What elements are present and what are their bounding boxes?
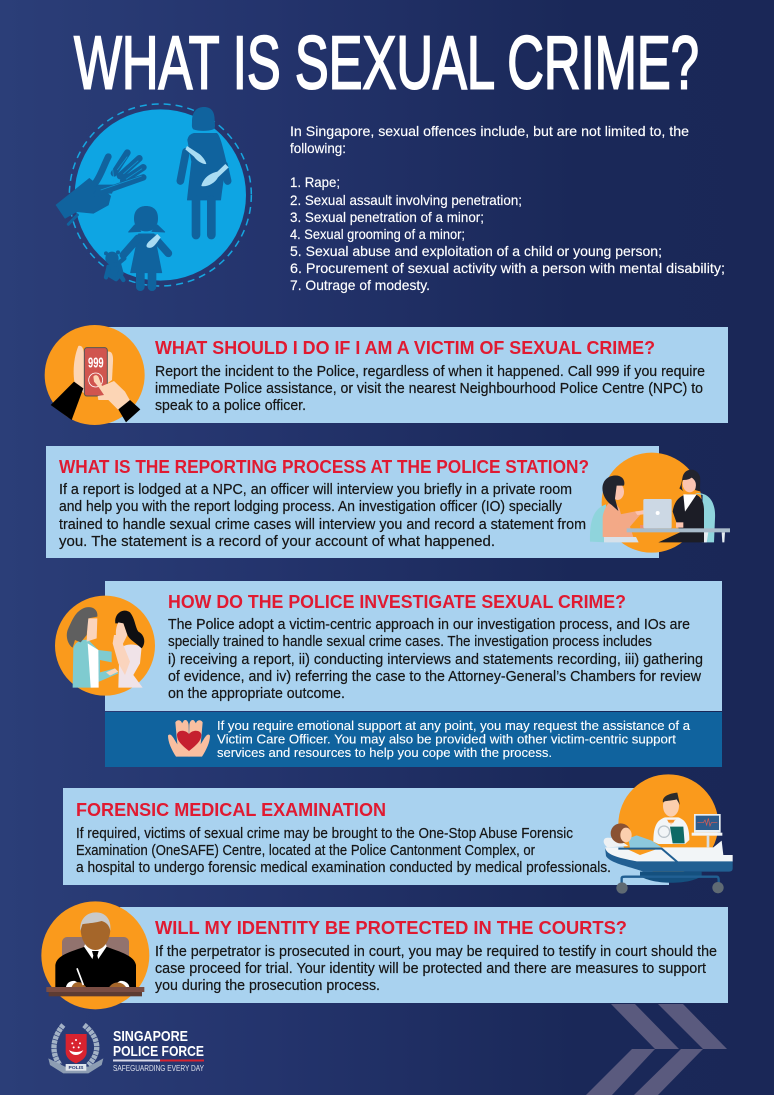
- logo text: Singapore Police Force: SINGAPORE: [113, 1028, 188, 1045]
- text block: reporting process: [59, 482, 586, 550]
- text block: victim advice: [155, 364, 705, 414]
- icon: phone calling 999: [45, 325, 145, 425]
- text block: victim advice: immediate Police assistance, or visit the nearest Neighbourhood Police Centre (NPC) to: [155, 381, 703, 397]
- heading: forensic: FORENSIC MEDICAL EXAMINATION: [76, 799, 386, 820]
- text block: victim advice: speak to a police officer.: [155, 398, 306, 414]
- text block: investigation: [168, 617, 703, 702]
- text block: investigation: specially trained to handle sexual crime cases. The investigation process includes: [168, 634, 652, 650]
- logo text: Singapore Police Force: POLICE FORCE: [113, 1043, 204, 1060]
- text block: forensic examination: [76, 826, 611, 876]
- intro text: list of sexual offences: following:: [290, 141, 346, 156]
- text block: reporting process: and help you with the report lodging process. An investigation officer (IO) specially: [59, 499, 563, 515]
- intro text: list of sexual offences: 6. Procurement of sexual activity with a person with mental disability;: [290, 261, 725, 276]
- heading: reporting process: WHAT IS THE REPORTING PROCESS AT THE POLICE STATION?: [59, 456, 589, 477]
- intro text: list of sexual offences: 7. Outrage of modesty.: [290, 278, 430, 293]
- intro text: list of sexual offences: In Singapore, sexual offences include, but are not limited to, the: [290, 124, 689, 139]
- text block: victim care officer: If you require emotional support at any point, you may request the assistance of a: [217, 718, 691, 733]
- panel: reporting process: [46, 446, 659, 558]
- text block: investigation: of evidence, and iv) referring the case to the Attorney-General’s Chambers for review: [168, 669, 702, 685]
- text block: courts: case proceed for trial. Your identity will be protected and there are measures to support: [155, 961, 706, 977]
- text block: victim care officer: Victim Care Officer. You may also be provided with other victim-centric support: [217, 732, 676, 746]
- text block: victim care officer: [217, 718, 691, 760]
- intro text: list of sexual offences: 4. Sexual grooming of a minor;: [290, 227, 465, 242]
- logo: Singapore Police Force crest: [48, 1025, 103, 1073]
- text block: forensic examination: a hospital to undergo forensic medical examination conducted by medical professionals.: [76, 860, 611, 876]
- text block: victim advice: Report the incident to the Police, regardless of when it happened. Call 999 if you require: [155, 364, 705, 380]
- panel: how do the police investigate: [105, 581, 722, 711]
- icon: doctor with patient on hospital bed: [604, 774, 733, 894]
- heading: courts: WILL MY IDENTITY BE PROTECTED IN THE COURTS?: [155, 917, 627, 938]
- heading: victim: WHAT SHOULD I DO IF I AM A VICTIM OF SEXUAL CRIME?: [155, 337, 655, 358]
- text block: courts: If the perpetrator is prosecuted in court, you may be required to testify in court should the: [155, 944, 717, 960]
- logo text: Singapore Police Force: SAFEGUARDING EVERY DAY: [113, 1063, 204, 1073]
- text block: courts: [155, 944, 717, 994]
- callout: emotional support: [105, 712, 722, 767]
- text block: forensic examination: If required, victims of sexual crime may be brought to the One-Stop Abuse Forensic: [76, 826, 573, 842]
- text block: courts: you during the prosecution process.: [155, 978, 380, 994]
- logo text: Singapore Police Force: [113, 1028, 204, 1073]
- intro text: list of sexual offences: 5. Sexual abuse and exploitation of a child or young person;: [290, 244, 662, 259]
- intro text: list of sexual offences: 1. Rape;: [290, 175, 340, 190]
- logo: Singapore Police Force crest: POLIS: [69, 1065, 84, 1071]
- text block: investigation: i) receiving a report, ii) conducting interviews and statements recording, iii) gathering: [168, 652, 703, 668]
- text block: investigation: The Police adopt a victim-centric approach in our investigation process, and IOs are: [168, 617, 690, 633]
- decorative chevrons: [586, 1004, 727, 1095]
- text block: reporting process: If a report is lodged at a NPC, an officer will interview you briefly in a private room: [59, 482, 572, 498]
- intro text: list of sexual offences: 3. Sexual penetration of a minor;: [290, 210, 484, 225]
- intro text: list of sexual offences: 2. Sexual assault involving penetration;: [290, 193, 522, 208]
- text block: reporting process: you. The statement is a record of your account of what happened.: [59, 534, 495, 550]
- panel: forensic medical examination: [63, 788, 669, 885]
- icon: phone calling 999: 999: [88, 355, 104, 371]
- icon: sexual crime illustration: [56, 104, 251, 287]
- text block: victim care officer: services and resources to help you cope with the process.: [217, 745, 552, 760]
- panel: what should I do if I am a victim: [95, 327, 728, 423]
- text block: reporting process: trained to handle sexual crime cases will interview you and record a statement from: [59, 517, 586, 533]
- panel: identity protection in the courts: [120, 907, 728, 1003]
- icon: judge: [41, 901, 149, 1009]
- icon: hands holding heart: [168, 720, 210, 757]
- icon: woman comforting a victim: [55, 596, 155, 696]
- intro text: list of sexual offences: [290, 124, 725, 293]
- icon: police officer interviewing a woman: [590, 453, 730, 553]
- text block: forensic examination: Examination (OneSAFE) Centre, located at the Police Cantonment Complex, or: [76, 843, 535, 859]
- text block: investigation: on the appropriate outcome.: [168, 686, 345, 702]
- heading: investigation: HOW DO THE POLICE INVESTIGATE SEXUAL CRIME?: [168, 591, 626, 612]
